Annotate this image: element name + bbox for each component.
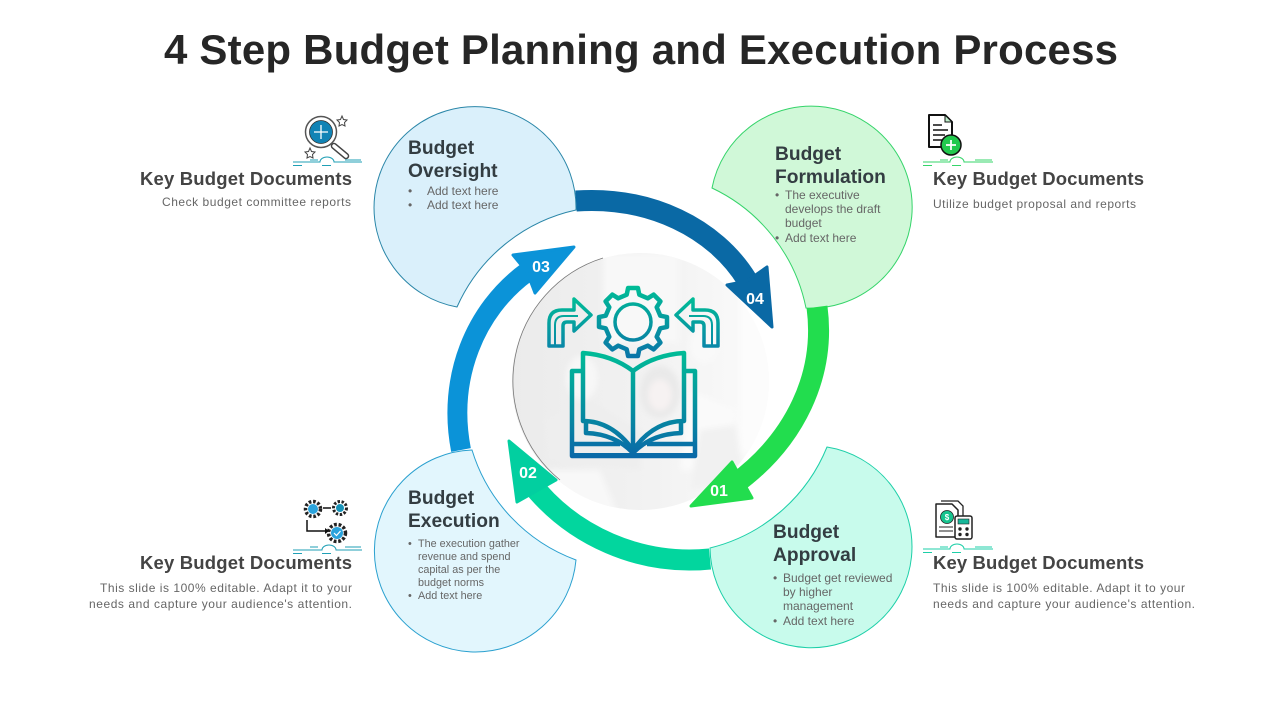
- panel: budget oversight: •: [408, 198, 412, 212]
- text block: key documents bottom left: [89, 552, 352, 611]
- icon: magnifier: [293, 116, 362, 166]
- icon: document plus: [923, 115, 993, 166]
- arrow: step 01 green: 01: [710, 483, 728, 500]
- panel: budget formulation: Budget: [775, 144, 842, 165]
- icon: gear: [599, 288, 667, 356]
- title: 4 Step Budget Planning and Execution Process: [164, 26, 1118, 73]
- panel: budget execution: Budget: [408, 488, 475, 509]
- panel: budget oversight: Budget: [408, 138, 475, 159]
- panel: budget approval: Budget: [773, 522, 840, 543]
- text block: key documents bottom right: needs and capture your audience's attention.: [933, 597, 1195, 611]
- panel: budget approval: [710, 447, 912, 648]
- panel: budget execution: •: [408, 538, 412, 550]
- panel: budget execution: The execution gather: [418, 538, 520, 550]
- panel: budget approval: Budget get reviewed: [783, 571, 892, 585]
- panel: budget formulation: Formulation: [775, 167, 886, 188]
- icon: right arrow: [676, 299, 718, 346]
- arrow: step 03 blue: [457, 247, 574, 450]
- text block: key documents top left: Check budget committee reports: [162, 195, 351, 209]
- arrow: step 01 green: [691, 307, 819, 506]
- panel: budget execution: [374, 450, 576, 652]
- panel: budget approval: management: [783, 599, 854, 613]
- arrow: step 02 teal: 02: [519, 465, 537, 482]
- text block: key documents top right: [933, 168, 1144, 211]
- panel: budget execution: capital as per the: [418, 564, 500, 576]
- arrow: step 02 teal: [509, 441, 710, 560]
- icon: book with gear and arrows: [549, 288, 718, 456]
- panel: budget formulation: •: [775, 231, 779, 245]
- icon: workflow gears: [293, 502, 362, 554]
- text block: key documents top right: Key Budget Documents: [933, 168, 1144, 189]
- panel: budget formulation: budget: [785, 216, 822, 230]
- arrow: step 03 blue: 03: [532, 259, 550, 276]
- panel: budget oversight: [374, 107, 576, 307]
- panel: budget execution: •: [408, 590, 412, 602]
- panel: budget execution: revenue and spend: [418, 551, 510, 563]
- panel: budget approval: •: [773, 571, 777, 585]
- panel: budget execution: Execution: [408, 511, 500, 532]
- panel: budget formulation: [712, 106, 912, 308]
- panel: budget approval: Approval: [773, 545, 856, 566]
- panel: budget formulation: Add text here: [785, 231, 857, 245]
- panel: budget execution: Add text here: [418, 590, 482, 602]
- text block: key documents bottom right: This slide is 100% editable. Adapt it to your: [933, 581, 1185, 595]
- central photo circle: [512, 253, 742, 510]
- panel: budget formulation: develops the draft: [785, 202, 881, 216]
- panel: budget approval: •: [773, 614, 777, 628]
- panel: budget formulation: The executive: [785, 188, 860, 202]
- text block: key documents bottom left: needs and capture your audience's attention.: [89, 597, 352, 611]
- panel: budget approval: by higher: [783, 585, 832, 599]
- text block: key documents bottom left: Key Budget Documents: [140, 552, 352, 573]
- text block: key documents top left: Key Budget Documents: [140, 168, 352, 189]
- text block: key documents bottom right: Key Budget Documents: [933, 552, 1144, 573]
- text block: key documents top right: Utilize budget proposal and reports: [933, 197, 1136, 211]
- icon: invoice and calculator: [923, 501, 993, 552]
- panel: budget oversight: Oversight: [408, 161, 498, 182]
- text block: key documents bottom left: This slide is 100% editable. Adapt it to your: [100, 581, 352, 595]
- text block: key documents bottom right: [933, 552, 1195, 611]
- panel: budget execution: budget norms: [418, 577, 485, 589]
- panel: budget formulation: •: [775, 188, 779, 202]
- panel: budget oversight: Add text here: [427, 184, 499, 198]
- panel: budget oversight: Add text here: [427, 198, 499, 212]
- icon: left arrow: [549, 299, 591, 346]
- arrow: step 04 blue: 04: [746, 291, 764, 308]
- panel: budget approval: Add text here: [783, 614, 855, 628]
- arrow: step 04 blue: [576, 200, 772, 327]
- text block: key documents top left: [140, 168, 352, 209]
- icon: invoice and calculator: $: [945, 513, 950, 522]
- icon: open book: [572, 353, 695, 456]
- panel: budget oversight: •: [408, 184, 412, 198]
